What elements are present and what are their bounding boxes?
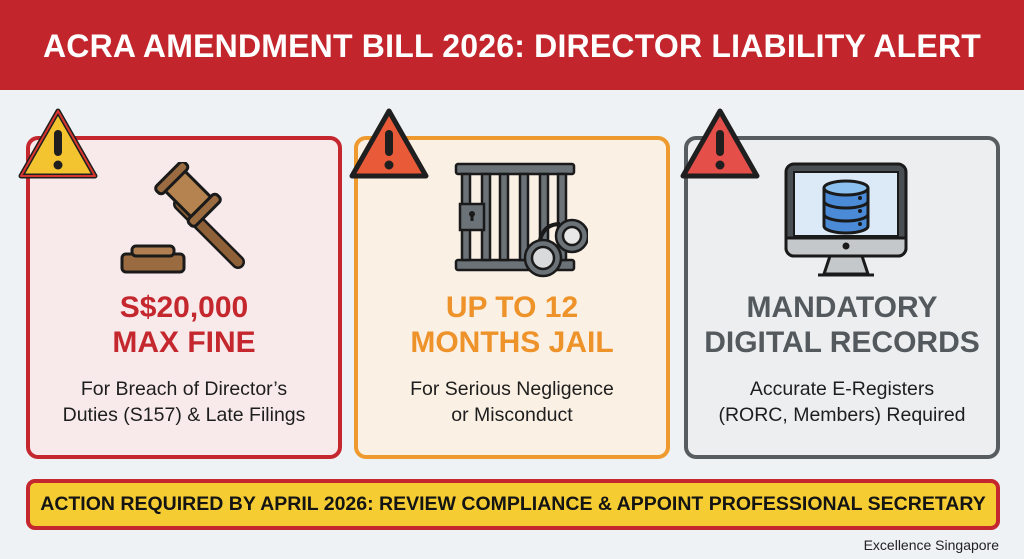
text: jail (410, 378, 614, 426)
panel: jail (354, 136, 670, 459)
text: jail: For Serious Negligence (410, 378, 614, 400)
heading: jail: UP TO 12 (446, 291, 578, 324)
text: fine (63, 378, 305, 426)
title (0, 0, 1024, 90)
title: ACRA AMENDMENT BILL 2026: DIRECTOR LIABILITY ALERT (43, 28, 981, 64)
action banner (26, 479, 1000, 530)
panel: fine (26, 136, 342, 459)
icon: warning orange (350, 108, 428, 178)
icon: jail and handcuffs (454, 162, 588, 278)
text: fine: Duties (S157) & Late Filings (63, 404, 305, 426)
icon: monitor database (784, 162, 908, 276)
footer credit: Excellence Singapore (864, 537, 999, 553)
heading: fine: MAX FINE (112, 326, 256, 359)
heading: jail (410, 291, 614, 359)
icon: warning yellow (18, 108, 98, 178)
text: records: Accurate E-Registers (750, 378, 934, 400)
text: records: (RORC, Members) Required (718, 404, 966, 426)
heading: jail: MONTHS JAIL (410, 326, 614, 359)
icon: warning red (680, 108, 760, 178)
heading: records: MANDATORY (746, 291, 938, 324)
panel: records (684, 136, 1000, 459)
icon: gavel (120, 162, 245, 274)
text: records (718, 378, 966, 426)
text: fine: For Breach of Director’s (81, 378, 287, 400)
heading: records (704, 291, 980, 359)
action banner: ACTION REQUIRED BY APRIL 2026: REVIEW COMPLIANCE & APPOINT PROFESSIONAL SECRETARY (40, 493, 986, 515)
heading: fine: S$20,000 (120, 291, 248, 324)
text: jail: or Misconduct (451, 404, 573, 426)
heading: records: DIGITAL RECORDS (704, 326, 980, 359)
heading: fine (112, 291, 256, 359)
